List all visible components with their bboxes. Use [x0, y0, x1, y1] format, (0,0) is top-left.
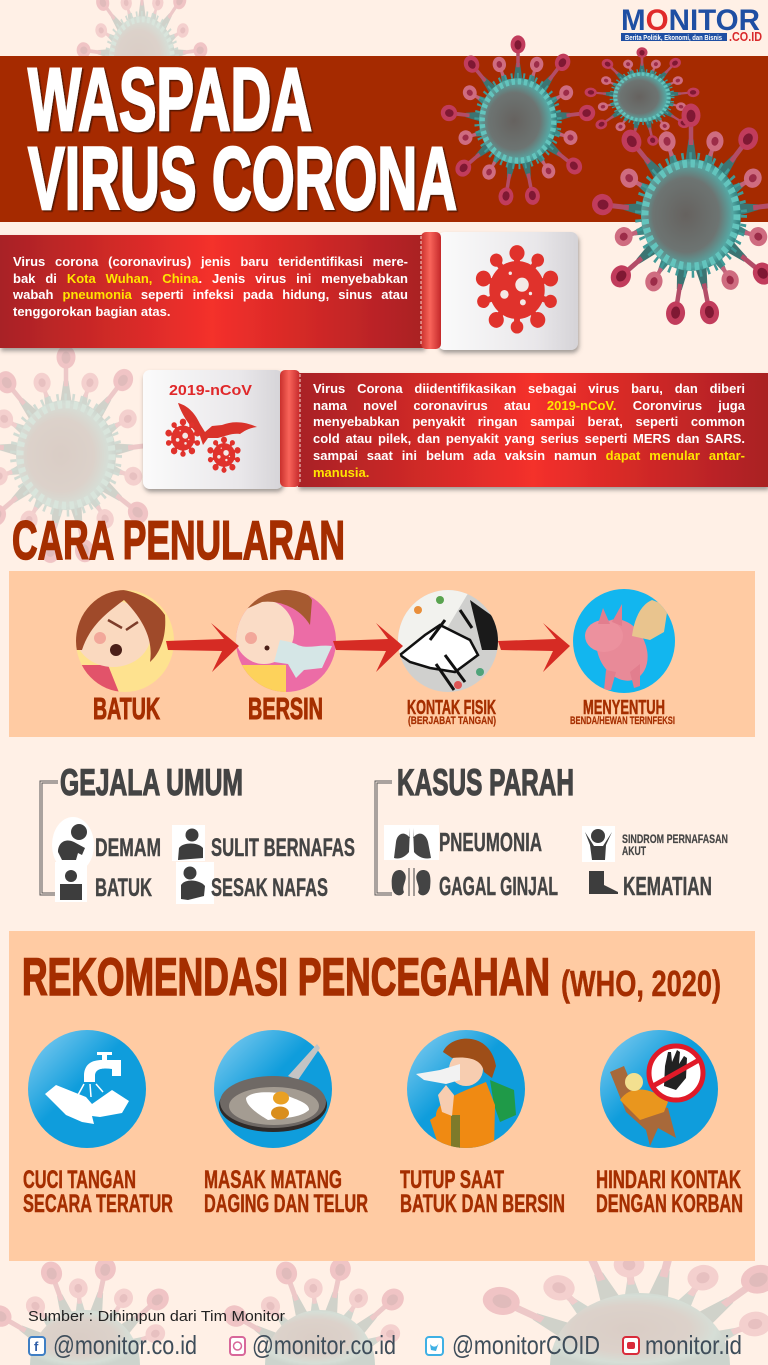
label: batuk: BATUK — [93, 691, 160, 726]
text block: 2019-nCoV paragraph: Virus Corona diidentifikasikan sebagai virus baru, dan diberi — [313, 381, 745, 396]
handle: facebook: @monitor.co.id — [53, 1330, 197, 1360]
social links — [29, 1330, 742, 1360]
title — [28, 49, 457, 228]
text block: 2019-nCoV paragraph: sampai saat ini belum ada vaksin namun dapat menular antar- — [313, 448, 745, 463]
arrow 2 — [333, 623, 403, 672]
icon: sulit bernafas — [172, 825, 205, 861]
text block: intro paragraph: Virus corona (coronavirus) jenis baru teridentifikasi mere- — [13, 254, 408, 269]
label: menyentuh: MENYENTUH — [583, 697, 665, 719]
icon: cover cough — [407, 1030, 525, 1150]
text block: 2019-nCoV paragraph: cold atau pilek, dan penyakit yang serius seperti MERS dan SARS. — [313, 431, 745, 446]
panel: intro card — [0, 232, 578, 350]
icon: red virus — [474, 245, 560, 334]
label: 2019-nCoV: 2019-nCoV — [169, 382, 252, 399]
label: masak matang — [204, 1166, 368, 1218]
icon: lungs — [384, 825, 439, 860]
icon: wash hands — [28, 1030, 146, 1148]
label: sindrom pernafasan akut: SINDROM PERNAFASAN — [622, 832, 728, 846]
label: pneumonia: PNEUMONIA — [439, 827, 542, 857]
icon: avoid contact — [600, 1030, 718, 1148]
panel: kasus parah — [376, 762, 728, 901]
source note: Sumber : Dihimpun dari Tim Monitor — [28, 1308, 285, 1325]
logo: Monitor: .CO.ID — [729, 29, 762, 44]
icon: demam — [52, 817, 94, 873]
label: cuci tangan — [23, 1166, 173, 1218]
label: menyentuh — [570, 697, 675, 727]
label: batuk: BATUK — [95, 874, 152, 902]
icon: sindrom — [582, 826, 615, 862]
scroll fold — [280, 370, 300, 487]
icon: batuk — [76, 590, 174, 692]
panel: prevention — [9, 931, 755, 1261]
icon: batuk — [55, 862, 87, 902]
label: kontak fisik: KONTAK FISIK — [407, 697, 496, 719]
icon: bersin — [236, 590, 336, 692]
logo: Monitor: MONITOR — [621, 4, 760, 37]
icon: instagram — [230, 1337, 245, 1355]
heading: Cara Penularan: CARA PENULARAN — [12, 509, 345, 571]
arrow 1 — [166, 623, 239, 672]
icon: sesak nafas — [176, 862, 214, 904]
label: tutup saat: TUTUP SAAT — [400, 1166, 504, 1194]
text block: intro paragraph: wabah pneumonia seperti infeksi pada hidung, sinus atau — [13, 287, 408, 302]
handle: instagram: @monitor.co.id — [252, 1330, 396, 1360]
icon: facebook: f — [34, 1339, 39, 1354]
label: sesak nafas: SESAK NAFAS — [211, 874, 328, 902]
text block: 2019-nCoV paragraph: menyebabkan penyakit ringan sampai berat, seperti common — [313, 414, 745, 429]
label: sulit bernafas: SULIT BERNAFAS — [211, 834, 355, 862]
icon: menyentuh — [573, 589, 675, 693]
label: tutup saat: BATUK DAN BERSIN — [400, 1190, 565, 1218]
label: kontak fisik — [407, 697, 496, 727]
handle: twitter: @monitorCOID — [452, 1330, 600, 1360]
label: gagal ginjal: GAGAL GINJAL — [439, 871, 558, 901]
icon: twitter — [426, 1337, 443, 1355]
icon: facebook — [29, 1337, 45, 1355]
heading: kasus parah: KASUS PARAH — [397, 762, 574, 803]
label: hindari kontak — [596, 1166, 743, 1218]
label: cuci tangan: SECARA TERATUR — [23, 1190, 173, 1218]
label: tutup saat — [400, 1166, 565, 1218]
arrow 3 — [498, 623, 570, 672]
label: kematian: KEMATIAN — [623, 871, 712, 901]
logo: Monitor: Berita Politik, Ekonomi, dan Bisnis — [625, 35, 722, 42]
heading: who 2020: (WHO, 2020) — [561, 963, 721, 1004]
icon: bat and viruses — [165, 403, 257, 473]
text block: 2019-nCoV paragraph: nama novel coronavirus atau 2019-nCoV. Coronvirus juga — [313, 398, 745, 413]
label: masak matang: DAGING DAN TELUR — [204, 1190, 368, 1218]
text block: intro paragraph — [13, 254, 408, 319]
text block: intro paragraph: bak di Kota Wuhan, China. Jenis virus ini menyebabkan — [13, 271, 408, 286]
panel: title banner — [0, 49, 768, 228]
icon: youtube — [623, 1337, 639, 1354]
title: WASPADA — [28, 49, 312, 149]
label: masak matang: MASAK MATANG — [204, 1166, 342, 1194]
panel: 2019-nCoV card — [143, 370, 768, 489]
icon: kidneys — [392, 868, 430, 896]
label: kontak fisik: (BERJABAT TANGAN) — [408, 715, 496, 727]
text block: 2019-nCoV paragraph: manusia. — [313, 465, 369, 480]
handle: youtube: monitor.id — [645, 1330, 742, 1360]
label: bersin: BERSIN — [248, 691, 323, 726]
panel: transmission — [9, 571, 755, 737]
text block: 2019-nCoV paragraph — [313, 381, 746, 480]
text block: intro paragraph: tenggorokan bagian atas. — [13, 304, 170, 319]
icon: kematian — [589, 871, 618, 894]
heading: gejala umum: GEJALA UMUM — [60, 762, 243, 803]
scroll fold — [421, 232, 441, 349]
panel: gejala umum — [41, 762, 355, 904]
label: sindrom pernafasan akut — [622, 832, 728, 858]
label: sindrom pernafasan akut: AKUT — [622, 844, 646, 858]
icon: kontak fisik — [398, 590, 498, 692]
illustration: corona viruses — [440, 35, 768, 327]
label: cuci tangan: CUCI TANGAN — [23, 1166, 136, 1194]
label: menyentuh: BENDA/HEWAN TERINFEKSI — [570, 715, 675, 727]
title: VIRUS CORONA — [28, 128, 457, 228]
label: demam: DEMAM — [95, 834, 161, 862]
icon: frying pan — [214, 1030, 332, 1148]
